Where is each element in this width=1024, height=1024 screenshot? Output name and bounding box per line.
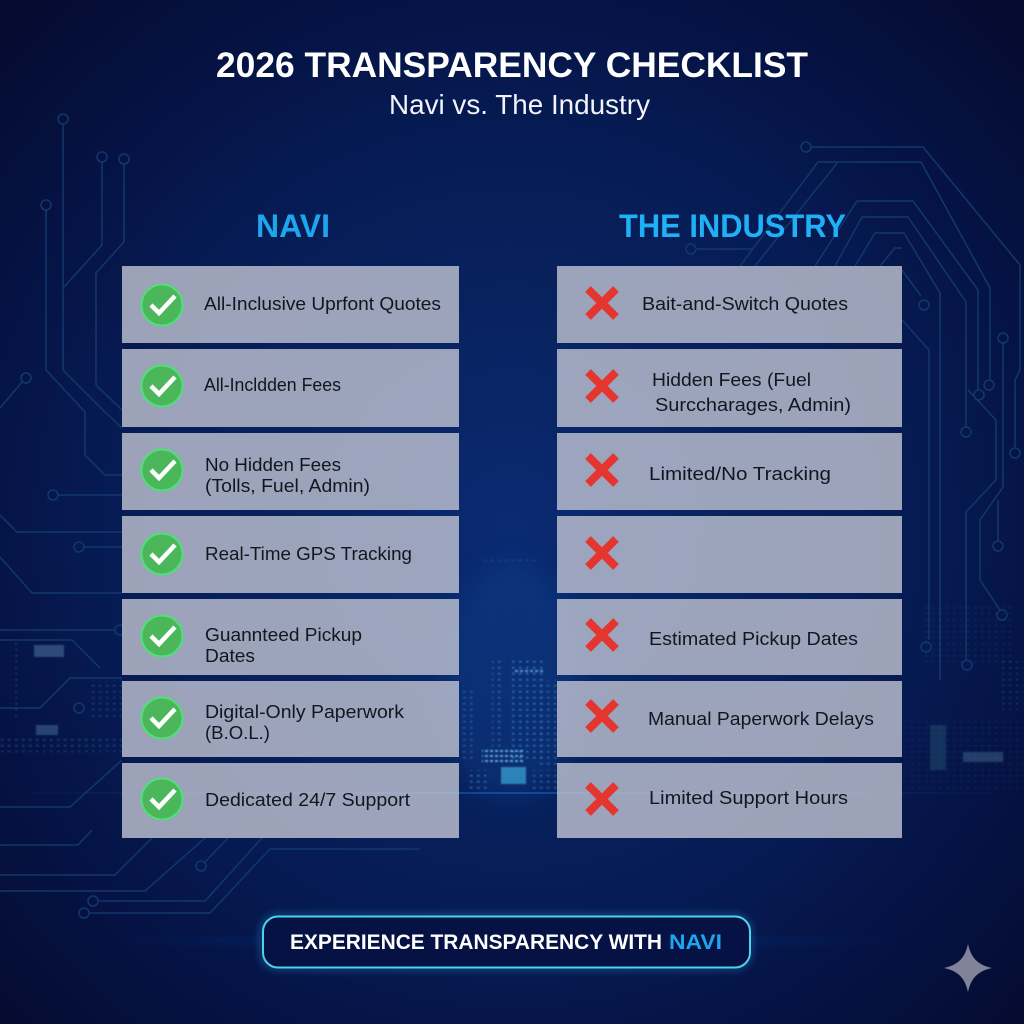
row 6: Digital-Only Paperwork	[205, 701, 405, 722]
row 4: Real-Time GPS Tracking	[205, 543, 412, 564]
row 2: Hidden Fees (Fuel	[652, 369, 811, 390]
circuit lines: right	[686, 142, 1020, 680]
call to action button: NAVI	[669, 931, 722, 954]
row 1: All-Inclusive Uprfont Quotes	[204, 293, 441, 314]
row 3: Limited/No Tracking	[649, 463, 831, 484]
row 1	[122, 266, 459, 343]
icon: sparkle	[944, 944, 992, 992]
call to action button	[263, 916, 750, 968]
row 7	[557, 763, 902, 838]
row 7	[122, 763, 459, 838]
row 5: Guannteed Pickup	[205, 624, 362, 645]
circuit lines: left	[0, 114, 420, 918]
row 2: Surccharages, Admin)	[655, 394, 851, 415]
row 6	[557, 681, 902, 757]
row 5: Estimated Pickup Dates	[649, 628, 858, 649]
row 3	[557, 433, 902, 510]
heading: NAVI: NAVI	[256, 208, 330, 244]
call to action button: EXPERIENCE TRANSPARENCY WITH	[290, 931, 662, 954]
row 6: Manual Paperwork Delays	[648, 708, 874, 729]
row 3	[122, 433, 459, 510]
subtitle: Navi vs. The Industry	[389, 89, 650, 120]
row 4	[122, 516, 459, 593]
title: 2026 TRANSPARENCY CHECKLIST	[216, 46, 808, 85]
row 2	[122, 349, 459, 427]
row 1	[557, 266, 902, 343]
row 3: No Hidden Fees	[205, 454, 341, 475]
city horizon line	[0, 792, 1024, 794]
city speckle right	[905, 605, 1024, 790]
city speckle left	[0, 640, 122, 752]
row 2	[557, 349, 902, 427]
row 2: All-Incldden Fees	[204, 374, 341, 395]
button glow	[90, 916, 920, 968]
panel: Industry column	[557, 266, 902, 838]
row 7: Dedicated 24/7 Support	[205, 789, 410, 810]
row 5	[557, 599, 902, 675]
row 5	[122, 599, 459, 675]
row 6	[122, 681, 459, 757]
row 3: (Tolls, Fuel, Admin)	[205, 475, 370, 496]
panel: Navi column	[122, 266, 459, 838]
row 4	[557, 516, 902, 593]
heading: THE INDUSTRY: THE INDUSTRY	[619, 208, 846, 244]
row 1: Bait-and-Switch Quotes	[642, 293, 848, 314]
row 5: Dates	[205, 645, 255, 666]
row 6: (B.O.L.)	[205, 722, 270, 743]
row 7: Limited Support Hours	[649, 787, 848, 808]
city skyline glow	[0, 560, 1024, 800]
